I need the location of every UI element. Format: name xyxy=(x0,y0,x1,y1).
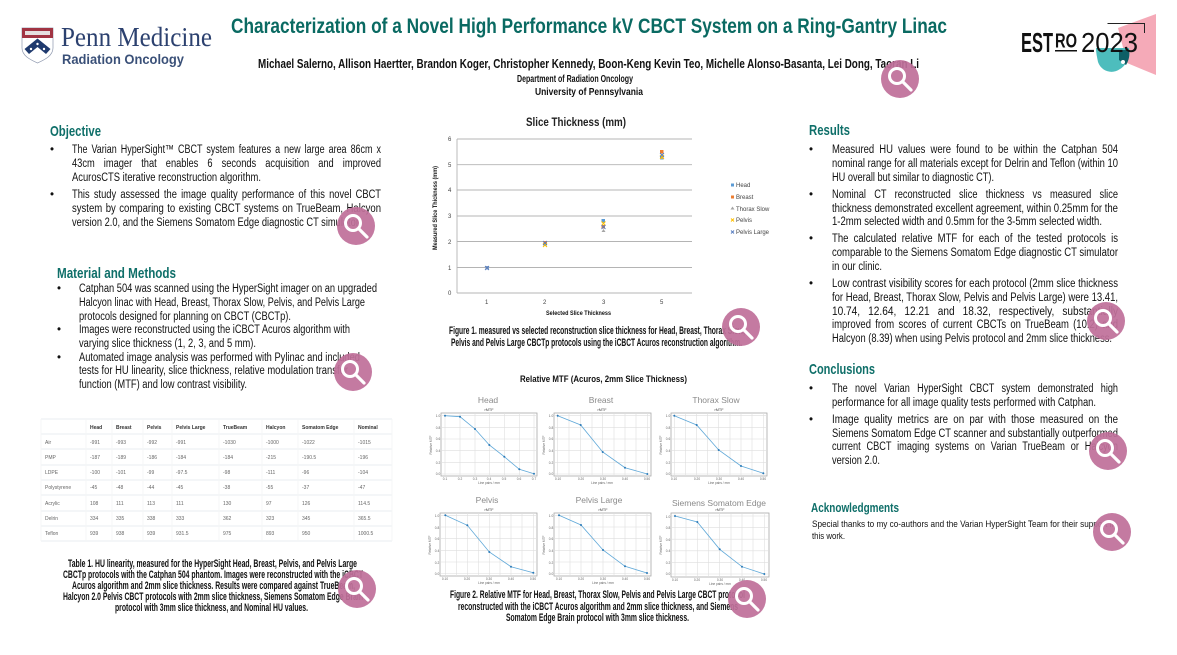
panel: material and methods: Catphan 504 was scanned using the HyperSight imager on an upgraded xyxy=(79,283,377,295)
chart: MTF siemens somatom edge: 0.0 xyxy=(666,572,670,576)
table: HU linearity: Air xyxy=(45,440,51,446)
chart: MTF pelvis large xyxy=(542,495,651,585)
chart: MTF thorax slow: 0.6 xyxy=(666,437,670,441)
heading: acknowledgments: Acknowledgments xyxy=(811,500,899,515)
chart: MTF breast: rMTF xyxy=(597,408,607,412)
table: HU linearity: 893 xyxy=(266,531,275,537)
icon: magnifier objective xyxy=(337,207,375,245)
caption: table 1: Acuros algorithm and 2mm slice thickness. Results were compared against TrueBeam, xyxy=(72,580,355,592)
chart: MTF pelvis large: 0.20 xyxy=(578,577,584,581)
panel: results: • xyxy=(809,233,813,245)
panel: objective: version 2.0, and the Siemens Somatom Edge diagnostic CT simulator. xyxy=(72,217,361,229)
panel: objective: • xyxy=(50,189,54,201)
table: HU linearity: Acrylic xyxy=(45,501,60,507)
chart: MTF head: 0.4 xyxy=(436,449,440,453)
table: HU linearity: -992 xyxy=(147,440,157,446)
chart: MTF breast xyxy=(542,395,651,485)
chart: MTF pelvis: rMTF xyxy=(484,508,494,512)
table: HU linearity: -38 xyxy=(223,485,230,491)
panel: objective: The Varian HyperSight™ CBCT system features a new large area 86cm x xyxy=(72,144,381,156)
panel: acknowledgments: this work. xyxy=(812,531,845,542)
panel: results: in our clinic. xyxy=(832,261,882,273)
chart: MTF pelvis large: Pelvis Large xyxy=(576,495,623,505)
table: HU linearity: 345 xyxy=(302,516,311,522)
icon: magnifier conclusions xyxy=(1089,432,1127,470)
table: HU linearity: 111 xyxy=(116,501,124,507)
chart: slice thickness scatter xyxy=(433,115,770,317)
caption: figure 2: Figure 2. Relative MTF for Head, Breast, Thorax Slow, Pelvis and Pelvis Large CBCT protocol xyxy=(450,589,745,601)
table: HU linearity: -1015 xyxy=(358,440,371,446)
panel: conclusions: • xyxy=(809,414,813,426)
chart: MTF breast: 0.10 xyxy=(555,477,561,481)
chart: MTF head: 0.8 xyxy=(436,426,440,430)
chart: MTF pelvis large: Relative MTF xyxy=(542,535,546,554)
table header xyxy=(90,425,378,431)
chart: MTF breast: 0.6 xyxy=(549,437,553,441)
chart: MTF thorax slow: 0.0 xyxy=(666,472,670,476)
table header: TrueBeam xyxy=(223,425,248,431)
table: HU linearity: -190.5 xyxy=(302,455,316,461)
table: HU linearity: -98 xyxy=(223,470,230,476)
table: HU linearity: 938 xyxy=(116,531,125,537)
chart: slice thickness scatter: 1 xyxy=(448,266,452,272)
icon: magnifier figure 1 xyxy=(722,308,760,346)
chart: slice thickness scatter: 2 xyxy=(543,300,547,306)
panel: material and methods: Automated image analysis was performed with Pylinac and included xyxy=(79,352,360,364)
panel: results: improved from scores of current CBCTs on TrueBeam (10.2) and xyxy=(832,319,1118,331)
table: HU linearity: 950 xyxy=(302,531,311,537)
chart: MTF thorax slow: 0.4 xyxy=(666,449,670,453)
table: HU linearity: -1022 xyxy=(302,440,315,446)
chart: MTF pelvis large: 0.30 xyxy=(600,577,606,581)
panel: acknowledgments: Special thanks to my co-authors and the Varian HyperSight Team for their support in xyxy=(812,519,1116,530)
table: HU linearity: 1000.5 xyxy=(358,531,374,537)
table: HU linearity: -55 xyxy=(266,485,273,491)
chart: MTF breast: 1.0 xyxy=(549,414,553,418)
chart: MTF pelvis: 0.0 xyxy=(435,572,439,576)
chart: MTF breast: 0.8 xyxy=(549,426,553,430)
table: HU linearity: -187 xyxy=(90,455,100,461)
caption: table 1: protocol with 3mm slice thickness, and Nominal HU values. xyxy=(115,602,308,614)
chart: MTF breast: 0.30 xyxy=(600,477,606,481)
chart: MTF head: 0.3 xyxy=(473,477,477,481)
table: HU linearity xyxy=(41,419,392,541)
heading: results: Results xyxy=(809,122,850,139)
chart: MTF thorax slow: 0.40 xyxy=(738,477,744,481)
authors and affiliation: Department of Radiation Oncology xyxy=(517,73,633,85)
table: HU linearity: -184 xyxy=(223,455,233,461)
chart: MTF pelvis: 0.8 xyxy=(435,526,439,530)
chart: MTF pelvis large: 0.6 xyxy=(549,537,553,541)
panel: objective: 43cm imager that enables 6 seconds acquisition and improved xyxy=(72,158,381,170)
logo: Penn Medicine Radiation Oncology xyxy=(22,22,212,67)
chart: MTF siemens somatom edge: Relative MTF xyxy=(659,535,663,554)
logo: Penn Medicine Radiation Oncology: Penn Medicine xyxy=(61,22,212,52)
chart: MTF head: Relative MTF xyxy=(429,435,433,454)
panel: results: The calculated relative MTF for each of the tested protocols is xyxy=(832,233,1118,245)
table: HU linearity: -1000 xyxy=(266,440,279,446)
chart: MTF thorax slow: Relative MTF xyxy=(659,435,663,454)
table: HU linearity: -48 xyxy=(116,485,123,491)
chart: MTF siemens somatom edge: 0.40 xyxy=(739,578,745,582)
panel: results: • xyxy=(809,144,813,156)
chart: MTF pelvis large: 0.8 xyxy=(549,526,553,530)
chart: MTF siemens somatom edge: 0.30 xyxy=(717,578,723,582)
chart: MTF breast: 0.20 xyxy=(578,477,584,481)
logo: ESTRO 2023 xyxy=(1021,14,1156,75)
table: HU linearity: -96 xyxy=(302,470,309,476)
panel: conclusions: • xyxy=(809,383,813,395)
chart: MTF siemens somatom edge: 0.6 xyxy=(666,538,670,542)
panel: objective: • xyxy=(50,144,54,156)
caption: figure 1: Pelvis and Pelvis Large CBCTp protocols using the iCBCT Acuros reconstruction algorithm. xyxy=(451,337,742,349)
chart: MTF siemens somatom edge: 0.2 xyxy=(666,561,670,565)
chart: MTF thorax slow: 0.50 xyxy=(760,477,766,481)
chart: MTF pelvis: Pelvis xyxy=(476,495,498,505)
chart: MTF pelvis: 0.2 xyxy=(435,561,439,565)
table header: Nominal xyxy=(358,425,378,431)
chart: MTF head: 0.7 xyxy=(532,477,536,481)
heading: relative MTF: Relative MTF (Acuros, 2mm Slice Thickness) xyxy=(520,374,687,385)
panel: results xyxy=(809,122,1118,345)
panel: results: Measured HU values were found to be within the Catphan 504 xyxy=(832,144,1118,156)
chart title: Slice Thickness (mm) xyxy=(526,115,626,129)
table: HU linearity: LDPE xyxy=(45,470,59,476)
chart: MTF pelvis: 0.50 xyxy=(530,577,536,581)
logo: ESTRO 2023: RO xyxy=(1055,30,1077,52)
panel: results: 1-2mm selected width and 0.5mm for the 3-5mm selected width. xyxy=(832,216,1102,228)
chart: slice thickness scatter: 3 xyxy=(448,214,452,220)
chart: MTF thorax slow: 0.20 xyxy=(694,477,700,481)
chart: slice thickness scatter: 1 xyxy=(485,300,489,306)
heading: conclusions: Conclusions xyxy=(809,361,875,378)
chart: MTF pelvis: 0.4 xyxy=(435,549,439,553)
chart: MTF thorax slow: 0.8 xyxy=(666,426,670,430)
panel: conclusions: Image quality metrics are on par with those measured on the xyxy=(832,414,1118,426)
heading: objective: Objective xyxy=(50,123,101,140)
chart: MTF head: 0.2 xyxy=(436,461,440,465)
chart: MTF head: 0.0 xyxy=(436,472,440,476)
heading: material and methods: Material and Methods xyxy=(57,265,176,282)
table: HU linearity: 338 xyxy=(147,516,156,522)
icon: magnifier acknowledgments xyxy=(1093,513,1131,551)
table header: Breast xyxy=(116,425,132,431)
panel: results: nominal range for all materials except for Delrin and Teflon (within 10 xyxy=(832,158,1118,170)
table: HU linearity: 114.5 xyxy=(358,501,370,507)
icon: magnifier results xyxy=(1087,302,1125,340)
table header: Somatom Edge xyxy=(302,425,339,431)
table: HU linearity: Teflon xyxy=(45,531,59,537)
panel: results: comparable to the Siemens Somatom Edge diagnostic CT simulator xyxy=(832,247,1118,259)
chart: MTF pelvis: 0.30 xyxy=(486,577,492,581)
chart: MTF head: 0.6 xyxy=(517,477,521,481)
table: HU linearity: -44 xyxy=(147,485,154,491)
table: HU linearity: 939 xyxy=(90,531,99,537)
chart: MTF siemens somatom edge: 0.20 xyxy=(694,578,700,582)
chart: MTF head: 0.4 xyxy=(487,477,491,481)
panel: material and methods: varying slice thickness (1, 2, 3, and 5 mm). xyxy=(79,338,256,350)
axis title: selected: Selected Slice Thickness xyxy=(546,310,611,317)
table: HU linearity: -1030 xyxy=(223,440,236,446)
table: HU linearity: -111 xyxy=(266,470,275,476)
panel: material and methods: • xyxy=(57,283,61,295)
chart: MTF breast: 0.40 xyxy=(622,477,628,481)
chart: MTF breast: Breast xyxy=(589,395,614,405)
panel: objective: system by comparing to existing CBCT systems on TrueBeam, Halcyon xyxy=(72,203,381,215)
chart: MTF pelvis large: 0.0 xyxy=(549,572,553,576)
chart: MTF thorax slow: 0.30 xyxy=(716,477,722,481)
panel: results: 10.74, 12.64, 12.21 and 18.32, respectively, substantially xyxy=(832,306,1118,318)
chart: MTF thorax slow: Thorax Slow xyxy=(692,395,740,405)
logo: Penn Medicine Radiation Oncology: Radiation Oncology xyxy=(62,52,184,67)
legend: Breast xyxy=(736,195,754,201)
table: HU linearity: -37 xyxy=(302,485,309,491)
chart: MTF thorax slow xyxy=(659,395,767,485)
chart: MTF pelvis: 0.20 xyxy=(464,577,470,581)
chart: MTF head: 0.6 xyxy=(436,437,440,441)
authors and affiliation: University of Pennsylvania xyxy=(535,86,643,98)
table: HU linearity: -196 xyxy=(358,455,368,461)
table: HU linearity: 333 xyxy=(176,516,185,522)
table: HU linearity: -101 xyxy=(116,470,126,476)
chart: MTF pelvis: 0.40 xyxy=(508,577,514,581)
authors and affiliation xyxy=(258,57,919,98)
axis title: measured: Measured Slice Thickness (mm) xyxy=(433,166,439,250)
chart: MTF breast: 0.4 xyxy=(549,449,553,453)
table header: Pelvis Large xyxy=(176,425,206,431)
table: HU linearity: 335 xyxy=(116,516,125,522)
panel: material and methods: • xyxy=(57,352,61,364)
chart: MTF siemens somatom edge: 0.50 xyxy=(761,578,767,582)
caption: figure 2: Somatom Edge Brain protocol with 3mm slice thickness. xyxy=(506,612,689,624)
icon: magnifier table caption xyxy=(338,570,376,608)
table: HU linearity: -47 xyxy=(358,485,365,491)
panel: material and methods xyxy=(57,265,377,391)
logo: ESTRO 2023: 2023 xyxy=(1081,27,1138,58)
panel: conclusions: Siemens Somatom Edge CT scanner and substantially outperformed xyxy=(832,428,1118,440)
panel: objective: This study assessed the image quality performance of this novel CBCT xyxy=(72,189,381,201)
caption: figure 2 xyxy=(450,589,745,624)
chart: slice thickness scatter: 2 xyxy=(448,240,452,246)
chart: MTF pelvis large: 0.10 xyxy=(556,577,562,581)
caption: table 1: Halcyon 2.0 Pelvis CBCT protocols with 2mm slice thickness, Siemens Somatom Edge Brain xyxy=(63,591,363,603)
icon: Penn shield xyxy=(22,28,53,63)
table: HU linearity: -99 xyxy=(147,470,154,476)
panel: results: HU overall but similar to diagnostic CT). xyxy=(832,172,994,184)
chart: MTF breast: 0.0 xyxy=(549,472,553,476)
chart: slice thickness scatter: 3 xyxy=(602,300,606,306)
chart: MTF thorax slow: rMTF xyxy=(714,408,724,412)
panel: conclusions: performance for all image quality tests performed with Catphan. xyxy=(832,397,1096,409)
chart: MTF breast: 0.50 xyxy=(644,477,650,481)
table: HU linearity: PMP xyxy=(45,455,56,461)
chart: MTF siemens somatom edge: 0.10 xyxy=(672,578,678,582)
legend: Head xyxy=(736,183,750,189)
chart: MTF breast: Relative MTF xyxy=(542,435,546,454)
chart: MTF head: Head xyxy=(478,395,498,405)
chart: MTF thorax slow: 0.10 xyxy=(671,477,677,481)
chart: MTF pelvis: Line pairs / mm xyxy=(478,581,500,585)
icon: magnifier authors xyxy=(881,60,919,98)
table: HU linearity: 323 xyxy=(266,516,275,522)
panel: material and methods: tests for HU linearity, slice thickness, relative modulation transfer xyxy=(79,365,348,377)
table: HU linearity: -993 xyxy=(116,440,126,446)
table: HU linearity: 939 xyxy=(147,531,156,537)
panel: results: thickness demonstrated excellent agreement, within 0.25mm for the xyxy=(832,203,1118,215)
table header: Head xyxy=(90,425,102,431)
chart: MTF pelvis: Relative MTF xyxy=(428,535,432,554)
chart: MTF head: 0.2 xyxy=(458,477,462,481)
panel: results: • xyxy=(809,189,813,201)
table: HU linearity: -991 xyxy=(176,440,186,446)
legend: Pelvis Large xyxy=(736,230,770,236)
chart: MTF head: 1.0 xyxy=(436,414,440,418)
chart: slice thickness scatter: 6 xyxy=(448,137,452,143)
table: HU linearity: -104 xyxy=(358,470,368,476)
caption: table 1 xyxy=(63,558,363,614)
table: HU linearity: 97 xyxy=(266,501,272,507)
table: HU linearity: 111 xyxy=(176,501,184,507)
table: HU linearity: -991 xyxy=(90,440,100,446)
logo: ESTRO 2023: EST xyxy=(1021,27,1053,58)
chart: MTF pelvis: 1.0 xyxy=(435,514,439,518)
table: HU linearity: -45 xyxy=(90,485,97,491)
panel: conclusions: version 2.0. xyxy=(832,455,880,467)
legend xyxy=(730,183,770,236)
chart: MTF pelvis large: 0.2 xyxy=(549,561,553,565)
caption: figure 1: Figure 1. measured vs selected reconstruction slice thickness for Head, Breast, Thorax Slow, xyxy=(449,325,745,337)
panel: material and methods: Halcyon linac with Head, Breast, Thorax Slow, Pelvis, and Pelvis Large xyxy=(79,297,365,309)
chart: slice thickness scatter: 5 xyxy=(660,300,664,306)
chart: MTF siemens somatom edge: Siemens Somatom Edge xyxy=(672,498,766,508)
chart: slice thickness scatter: 0 xyxy=(448,291,452,297)
chart: MTF siemens somatom edge: 0.4 xyxy=(666,549,670,553)
chart: MTF pelvis large: 1.0 xyxy=(549,514,553,518)
chart: MTF pelvis xyxy=(428,495,537,585)
panel: material and methods: protocols designed for planning on CBCT (CBCTp). xyxy=(79,311,291,323)
panel: results: Low contrast visibility scores for each protocol (2mm slice thickness xyxy=(832,278,1118,290)
chart: slice thickness scatter: 5 xyxy=(448,163,452,169)
caption: table 1: Table 1. HU linearity, measured for the HyperSight Head, Breast, Pelvis, and Pelvis Large xyxy=(68,558,357,570)
chart: MTF pelvis: 0.6 xyxy=(435,537,439,541)
chart: MTF pelvis large: 0.4 xyxy=(549,549,553,553)
caption: table 1: CBCTp protocols with the Catphan 504 phantom. Images were reconstructed with the iCBCT xyxy=(63,569,363,581)
table: HU linearity: 126 xyxy=(302,501,311,507)
table: HU linearity: 108 xyxy=(90,501,99,507)
chart: MTF siemens somatom edge: Line pairs / mm xyxy=(709,582,731,586)
chart: MTF breast: 0.2 xyxy=(549,461,553,465)
table: HU linearity: -184 xyxy=(176,455,186,461)
table: HU linearity: 113 xyxy=(147,501,155,507)
chart: MTF siemens somatom edge: 0.8 xyxy=(666,526,670,530)
panel: material and methods: function (MTF) and low contrast visibility. xyxy=(79,379,247,391)
panel: results: Halcyon (8.39) when using Pelvis protocol and 2mm slice thickness. xyxy=(832,333,1112,345)
panel: conclusions xyxy=(809,361,1118,467)
table: HU linearity: 931.5 xyxy=(176,531,189,537)
legend: Pelvis xyxy=(736,218,752,224)
legend: Thorax Slow xyxy=(736,207,770,213)
chart: MTF pelvis large: 0.40 xyxy=(622,577,628,581)
chart: MTF siemens somatom edge: 1.0 xyxy=(666,515,670,519)
table: HU linearity: -186 xyxy=(147,455,157,461)
title: Characterization of a Novel High Performance kV CBCT System on a Ring-Gantry Linac xyxy=(231,14,947,38)
chart: MTF pelvis large: rMTF xyxy=(598,508,608,512)
table: HU linearity: 130 xyxy=(223,501,232,507)
table: HU linearity: -45 xyxy=(176,485,183,491)
chart: MTF head: rMTF xyxy=(484,408,494,412)
panel: acknowledgments xyxy=(811,500,1116,542)
chart: MTF head: Line pairs / mm xyxy=(478,481,500,485)
chart: MTF siemens somatom edge xyxy=(659,498,769,586)
table: HU linearity: Delrin xyxy=(45,516,58,522)
panel: material and methods: • xyxy=(57,324,61,336)
panel: material and methods: Images were reconstructed using the iCBCT Acuros algorithm with xyxy=(79,324,350,336)
chart: MTF thorax slow: 0.2 xyxy=(666,461,670,465)
icon: magnifier figure 2 xyxy=(728,580,766,618)
caption: figure 2: reconstructed with the iCBCT Acuros algorithm and 2mm slice thickness, and Siemens xyxy=(458,601,738,613)
caption: figure 1 xyxy=(449,325,745,349)
authors and affiliation: Michael Salerno, Allison Haertter, Brandon Koger, Christopher Kennedy, Boon-Keng Kevin Teo, Michelle Alonso-Basanta, Lei Dong, Taoran Li xyxy=(258,57,919,71)
panel: results: Nominal CT reconstructed slice thickness vs measured slice xyxy=(832,189,1118,201)
panel: objective xyxy=(50,123,381,229)
table: HU linearity: -215 xyxy=(266,455,276,461)
table: HU linearity: -97.5 xyxy=(176,470,188,476)
panel: results: for Head, Breast, Thorax Slow, Pelvis and Pelvis Large) were 13.41, xyxy=(832,292,1118,304)
table: HU linearity: Polystyrene xyxy=(45,485,71,491)
data points xyxy=(485,150,664,270)
chart: MTF breast: Line pairs / mm xyxy=(591,481,613,485)
chart: MTF pelvis large: Line pairs / mm xyxy=(592,581,614,585)
chart: MTF head: 0.5 xyxy=(502,477,506,481)
chart: slice thickness scatter: 4 xyxy=(448,188,452,194)
chart: MTF head: 0.1 xyxy=(443,477,447,481)
table: HU linearity: 362 xyxy=(223,516,232,522)
chart: MTF thorax slow: Line pairs / mm xyxy=(708,481,730,485)
chart: MTF siemens somatom edge: rMTF xyxy=(715,508,725,512)
chart: MTF head xyxy=(429,395,537,485)
chart: MTF pelvis: 0.10 xyxy=(442,577,448,581)
table: HU linearity: 334 xyxy=(90,516,99,522)
table: HU linearity: -189 xyxy=(116,455,126,461)
table: HU linearity: -100 xyxy=(90,470,100,476)
table: HU linearity: 365.5 xyxy=(358,516,371,522)
panel: results: • xyxy=(809,278,813,290)
table header: Halcyon xyxy=(266,425,285,431)
table: HU linearity: 975 xyxy=(223,531,232,537)
icon: magnifier methods xyxy=(334,353,372,391)
chart: MTF thorax slow: 1.0 xyxy=(666,414,670,418)
chart: MTF pelvis large: 0.50 xyxy=(644,577,650,581)
table header: Pelvis xyxy=(147,425,162,431)
panel: objective: AcurosCTS iterative reconstruction algorithm. xyxy=(72,172,261,184)
